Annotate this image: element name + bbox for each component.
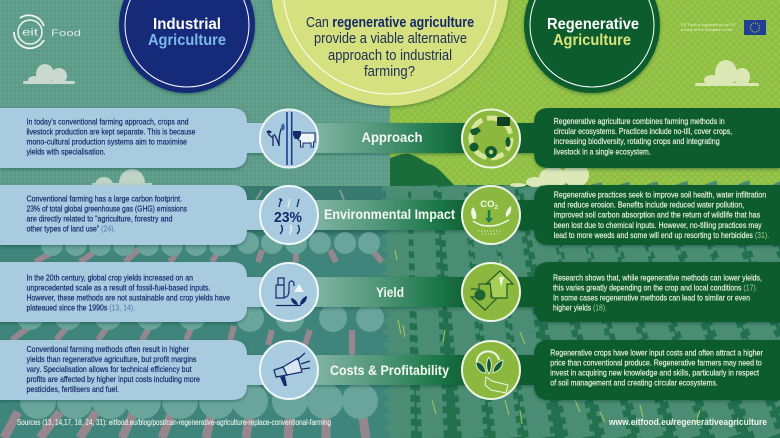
EU funding note [681, 23, 736, 32]
left panel: environmental impact [0, 185, 270, 245]
left panel: costs and profitability: vary. Specialisation allows for technical efficiency but [26, 364, 192, 374]
band label: Yield: Yield [376, 284, 404, 300]
background: regenerative farmland [390, 0, 780, 438]
central question: provide a viable alternative [314, 31, 467, 47]
central question: approach to industrial [328, 48, 452, 64]
row: Approach [0, 108, 780, 168]
EU funding note: EIT Food is supported by the EIT [681, 23, 736, 27]
central question: farming? [364, 64, 415, 80]
row: Costs & Profitability [0, 340, 780, 400]
right panel: yield: higher yields (18). [553, 302, 607, 312]
cloud left [23, 64, 75, 84]
row: Environmental Impact [0, 185, 780, 245]
left panel: approach [0, 108, 270, 168]
left panel: yield: unprecedented scale as a result of fossil-fuel-based inputs. [26, 282, 210, 292]
left panel: approach: mono-cultural production systems aim to maximise [26, 136, 187, 146]
heading circle: Regenerative Agriculture: Regenerative [547, 16, 639, 33]
cloud behind right panels [510, 163, 589, 189]
icon: 23 percent with arrows [260, 186, 318, 244]
left panel: approach: livestock production are kept separate. This is because [26, 126, 196, 136]
icon: CO2 into soil: 2 [494, 205, 498, 211]
left panel: yield: plateaued since the 1990s (13, 14). [26, 302, 135, 312]
band label: Costs & Profitability: Costs & Profitability [330, 362, 449, 378]
central question [271, 0, 509, 106]
right panel: costs and profitability: of soil management and creating circular ecosystems. [550, 378, 718, 388]
icon: megaphone [260, 341, 318, 399]
heading circle: Regenerative Agriculture [524, 0, 660, 93]
right panel: yield [470, 262, 780, 322]
icon: crops and cow separated [260, 110, 318, 168]
left panel: costs and profitability: profits are affected by higher input costs including more [26, 374, 200, 384]
right panel: yield: this varies greatly depending on the crop and local conditions (17). [553, 282, 758, 292]
left panel: yield: In the 20th century, global crop yields increased on an [26, 272, 193, 282]
icon: 23 percent with arrows: 23% [274, 209, 302, 226]
icon: CO2 into soil [462, 186, 520, 244]
background: industrial farmland [0, 0, 390, 438]
icon: bottle and fertiliser to plant [260, 263, 318, 321]
band label: Yield [305, 277, 475, 307]
right panel: environmental impact [470, 185, 780, 245]
right panel: approach: Regenerative agriculture combines farming methods in [554, 116, 725, 126]
left panel: yield: However, these methods are not sustainable and crop yields have [26, 292, 230, 302]
heading circle: Industrial Agriculture: Agriculture [148, 32, 226, 49]
left panel: environmental impact: are directly related to “agriculture, forestry and [26, 214, 173, 224]
sources line: Sources (13, 14,17, 18, 24, 31): eitfood.eu/blog/post/can-regenerative-agriculture-replace-conventional-farming [17, 418, 331, 427]
logo: EIT Food [14, 15, 81, 48]
EU funding note: a body of the European Union [681, 28, 733, 32]
band label: Environmental Impact [305, 200, 475, 230]
left panel: costs and profitability: pesticides, fertilisers and fuel. [26, 384, 119, 394]
right panel: approach: livestock in a single ecosystem. [554, 146, 651, 156]
heading circle: Industrial Agriculture: Industrial [153, 16, 221, 33]
logo: EIT Food: eit [22, 28, 38, 38]
left panel: costs and profitability [0, 340, 270, 400]
icon: plant with price tag [462, 341, 520, 399]
left panel: yield [0, 262, 270, 322]
band label: Approach: Approach [362, 129, 422, 145]
right panel: approach [470, 108, 780, 168]
cloud right [695, 60, 759, 86]
heading circle: Regenerative Agriculture: Agriculture [553, 32, 631, 49]
left panel: environmental impact: other types of land use” (24). [26, 224, 116, 234]
band label: Costs & Profitability [305, 355, 475, 385]
central question: Can regenerative agriculture [306, 15, 474, 31]
left panel: environmental impact: 23% of total global greenhouse gas (GHG) emissions [26, 204, 187, 214]
band label: Approach [305, 123, 475, 153]
heading circle: Industrial Agriculture [119, 0, 255, 93]
right panel: costs and profitability [470, 340, 780, 400]
left panel: costs and profitability: yields than regenerative agriculture, but profit margins [26, 354, 196, 364]
right panel: environmental impact: and reduce erosion. Benefits include reduced water pollution, [554, 200, 744, 210]
right panel: approach: circular ecosystems. Practices include no-till, cover crops, [554, 126, 732, 136]
left panel: approach: yields with specialisation. [26, 146, 106, 156]
EU flag [744, 20, 766, 35]
icon: CO2 into soil: CO [480, 199, 494, 210]
left panel: environmental impact: Conventional farming has a large carbon footprint. [26, 194, 182, 204]
icon: up and down yield arrows [462, 263, 520, 321]
row: Yield [0, 262, 780, 322]
left panel: approach: In today's conventional farming approach, crops and [26, 116, 189, 126]
cloud behind panels [92, 169, 152, 197]
left panel: costs and profitability: Conventional farming methods often result in higher [26, 344, 189, 354]
logo: EIT Food: Food [51, 28, 81, 39]
band label: Environmental Impact: Environmental Impact [324, 206, 455, 222]
right panel: approach: increasing biodiversity, rotating crops and integrating [554, 136, 720, 146]
icon: circular ecosystem [462, 110, 520, 168]
